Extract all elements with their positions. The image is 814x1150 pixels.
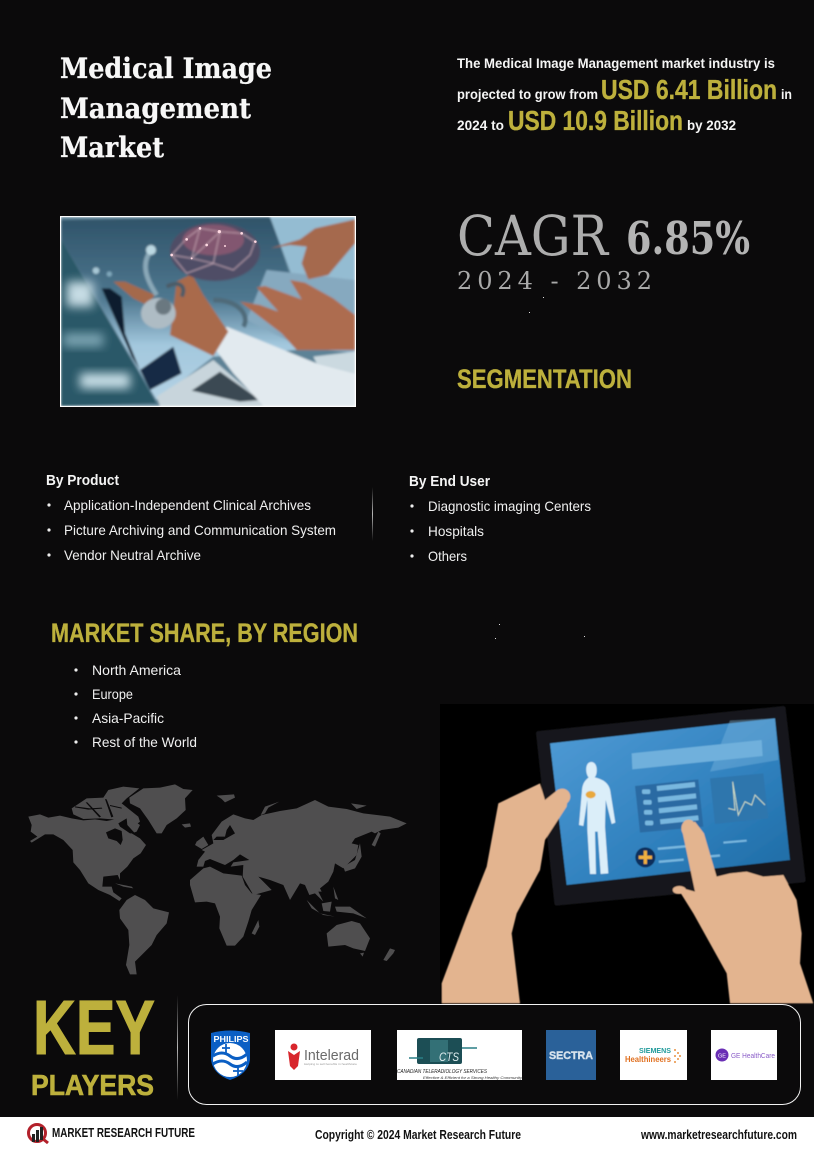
keyboard — [157, 360, 267, 406]
world map — [28, 784, 407, 974]
region list: Asia-Pacific — [92, 710, 164, 726]
logo: Canadian Teleradiology Services: CANADIAN TELERADIOLOGY SERVICES — [397, 1069, 488, 1075]
CAGR figure: 6.85% — [626, 212, 750, 265]
market growth summary: projected to grow from — [457, 86, 598, 102]
left hand — [442, 783, 570, 1003]
key players heading: PLAYERS — [31, 1070, 154, 1102]
logo: Canadian Teleradiology Services: Effective & Efficient for a Strong Healthy Community — [423, 1075, 523, 1080]
footer: Copyright © 2024 Market Research Future — [315, 1128, 521, 1142]
segment list: by product: Application-Independent Clinical Archives — [64, 497, 311, 513]
logo: Sectra — [546, 1030, 596, 1080]
photo: doctor with laptop and brain scan — [60, 216, 356, 407]
region list: Rest of the World — [92, 734, 197, 750]
market share heading: MARKET SHARE, BY REGION — [51, 618, 358, 648]
segment list: by product: Picture Archiving and Communication System — [64, 522, 336, 538]
logo: Philips: PHILIPS — [214, 1035, 249, 1044]
market growth summary: in — [781, 86, 792, 102]
logo: GE HealthCare: GE HealthCare — [731, 1051, 775, 1060]
right hand — [673, 820, 813, 1003]
title: Medical Image — [60, 52, 272, 85]
market growth summary — [457, 55, 792, 136]
region list: North America — [92, 662, 181, 678]
tablet body — [538, 708, 803, 903]
sleeve — [213, 327, 355, 406]
stethoscope — [145, 250, 157, 295]
logo: Siemens Healthineers: SIEMENS — [639, 1048, 671, 1055]
market growth summary: by 2032 — [687, 117, 736, 133]
market growth summary: USD 10.9 Billion — [508, 105, 683, 136]
title — [60, 52, 272, 164]
segment list: by end user — [409, 473, 591, 564]
logo: Siemens Healthineers — [620, 1030, 687, 1080]
logo: Canadian Teleradiology Services — [397, 1030, 523, 1080]
tablet illustration — [440, 704, 814, 1004]
CAGR figure: 2024 - 2032 — [457, 267, 652, 295]
market growth summary: The Medical Image Management market industry is — [457, 55, 775, 71]
CAGR figure — [457, 204, 750, 295]
screen reflections — [102, 288, 140, 370]
title: Management — [60, 92, 251, 125]
segment list: by end user: Hospitals — [428, 523, 484, 539]
footer logo icon — [28, 1124, 48, 1143]
logo: Canadian Teleradiology Services: CTS — [439, 1050, 459, 1064]
segment list: by product: Vendor Neutral Archive — [64, 547, 201, 563]
logo: Sectra: SECTRA — [549, 1050, 593, 1062]
key players heading — [31, 985, 155, 1102]
plus icon — [635, 847, 655, 867]
region list: Europe — [92, 686, 133, 702]
logo: Intelerad: Intelerad — [304, 1047, 359, 1064]
segmentation heading: SEGMENTATION — [457, 364, 632, 394]
laptop screen — [61, 217, 298, 401]
segment list: by end user: By End User — [409, 473, 490, 490]
logo: Siemens Healthineers: Healthineers — [625, 1055, 672, 1064]
segment list: by product — [46, 472, 336, 563]
segment list: by end user: Others — [428, 548, 467, 564]
CAGR figure: CAGR — [457, 204, 609, 268]
region list — [74, 662, 197, 750]
footer: MARKET RESEARCH FUTURE — [52, 1125, 195, 1140]
key players heading: KEY — [33, 985, 155, 1071]
footer — [0, 1117, 814, 1150]
logo: Intelerad: Helping to sell benefits in healthcare — [304, 1062, 357, 1066]
logo: Intelerad — [275, 1030, 371, 1080]
body figure — [579, 762, 615, 874]
title: Market — [60, 131, 164, 164]
segment list: by product: By Product — [46, 472, 119, 489]
key players panel — [188, 1004, 800, 1104]
market growth summary: USD 6.41 Billion — [601, 74, 777, 105]
brain — [170, 222, 260, 281]
logo: Philips — [211, 1030, 250, 1080]
hands — [170, 274, 228, 356]
market growth summary: 2024 to — [457, 117, 504, 133]
segment list: by end user: Diagnostic imaging Centers — [428, 498, 591, 514]
logo: GE HealthCare: GE — [718, 1054, 727, 1060]
tablet screen — [550, 718, 790, 885]
logo: GE HealthCare — [711, 1030, 777, 1080]
